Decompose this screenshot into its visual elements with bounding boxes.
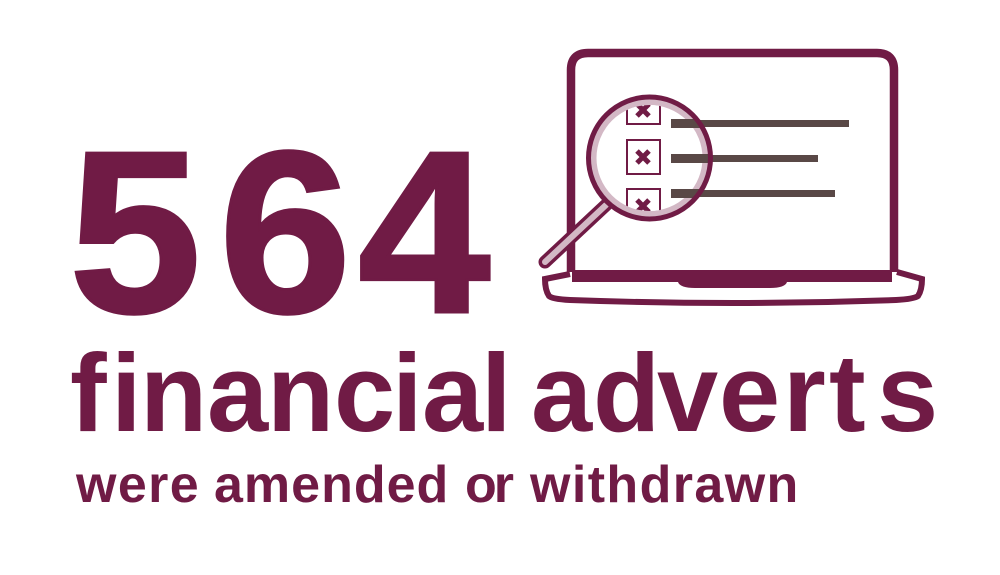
subheading: were amended or withdrawn: were (75, 456, 200, 514)
magnified bars (671, 119, 708, 198)
subheading: were amended or withdrawn: or (465, 456, 514, 514)
subheading: were amended or withdrawn: amended (214, 456, 449, 514)
checkbox three (626, 188, 661, 211)
laptop base (545, 272, 922, 303)
list lines (671, 120, 849, 197)
icon: magnifying glass (545, 90, 731, 262)
heading: financial adverts: financial adverts (70, 332, 938, 455)
magnifier lens (594, 102, 706, 214)
laptop hinge bar (572, 270, 892, 288)
icon: laptop (545, 53, 922, 303)
laptop screen (571, 53, 894, 272)
checkbox two (627, 140, 660, 174)
magnifier rim (588, 97, 710, 219)
infographic canvas (72, 48, 934, 503)
big number 564: 564 (69, 103, 490, 361)
line two (671, 155, 818, 162)
line one (671, 120, 849, 127)
checkboxes (626, 105, 661, 211)
line three (671, 190, 835, 197)
checkbox one (626, 105, 661, 125)
magnifier handle (545, 205, 606, 262)
subheading: were amended or withdrawn: withdrawn (529, 456, 800, 514)
